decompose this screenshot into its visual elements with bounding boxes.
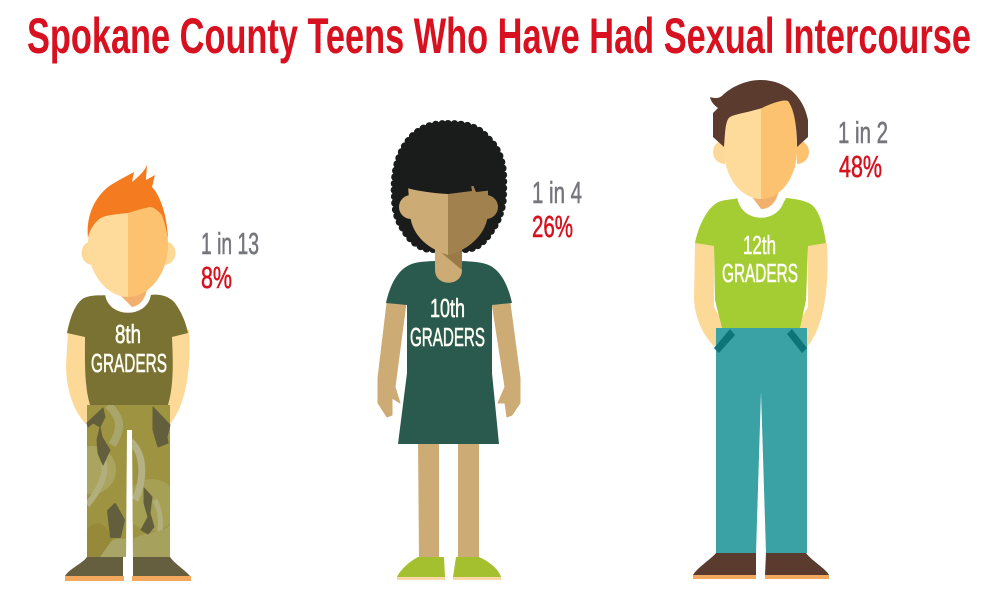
icon: ears: [82, 241, 176, 265]
icon: left arm: [378, 303, 406, 417]
icon: afro hair: [395, 124, 503, 249]
ratio: 1 in 4: [532, 175, 582, 210]
stat: 8th grade: [201, 226, 259, 295]
text: 12th graders: GRADERS: [722, 258, 798, 288]
icon: pockets: [714, 329, 807, 353]
icon: right shoe: [453, 557, 501, 577]
icon: legs: [418, 440, 479, 558]
figure: 8th grader: [65, 165, 191, 581]
text: 8th graders: 8th: [115, 319, 141, 349]
text: 10th graders: [410, 293, 485, 352]
icon: face shade: [761, 100, 797, 199]
stat: 10th grade: [532, 175, 582, 244]
icon: neck: [435, 245, 462, 283]
icon: right arm: [492, 303, 520, 417]
icon: face: [88, 205, 128, 297]
icon: left shoe: [693, 553, 756, 575]
icon: right arm: [794, 243, 828, 347]
icon: hair: [710, 80, 808, 147]
text: 12th graders: [722, 230, 798, 288]
icon: right arm: [160, 330, 190, 424]
icon: neck: [115, 290, 147, 307]
icon: dress: [386, 261, 512, 444]
icon: right shoe: [765, 553, 829, 575]
percentage: 48%: [839, 149, 882, 184]
ratio: 1 in 2: [838, 115, 888, 150]
icon: face: [408, 186, 448, 255]
percentage: 8%: [201, 260, 232, 295]
icon: shirt collar: [737, 196, 785, 218]
icon: ears: [399, 195, 411, 219]
icon: trousers: [716, 328, 807, 553]
icon: shoe soles: [693, 575, 829, 579]
icon: right shoe: [133, 557, 190, 576]
icon: neck: [747, 190, 779, 209]
icon: shoe soles: [65, 576, 191, 581]
icon: spiky hair: [88, 165, 168, 238]
icon: fringe: [405, 175, 494, 194]
text: 10th graders: 10th: [430, 293, 465, 323]
icon: left shoe: [65, 557, 123, 576]
icon: camouflage trousers: [86, 405, 170, 557]
icon: shoe soles: [397, 577, 501, 580]
text: 12th graders: 12th: [743, 230, 776, 260]
text: 10th graders: GRADERS: [410, 322, 485, 352]
icon: t-shirt: [67, 295, 188, 405]
percentage: 26%: [532, 209, 573, 244]
text: 8th graders: [91, 319, 167, 378]
icon: face: [724, 100, 761, 199]
figure: 10th grader: [378, 124, 520, 580]
icon: face shade: [448, 186, 488, 255]
ratio: 1 in 13: [201, 226, 259, 261]
figure: 12th grader: [693, 80, 829, 579]
icon: left shoe: [397, 557, 445, 577]
text: 8th graders: GRADERS: [91, 348, 167, 378]
icon: shirt collar: [105, 294, 151, 313]
stat: 12th grade: [838, 115, 888, 184]
icon: t-shirt: [695, 198, 826, 328]
icon: face shade: [128, 205, 168, 297]
icon: left arm: [694, 243, 727, 347]
icon: left arm: [66, 330, 97, 424]
icon: ears: [713, 140, 725, 164]
icon: neck shadow: [438, 245, 462, 270]
